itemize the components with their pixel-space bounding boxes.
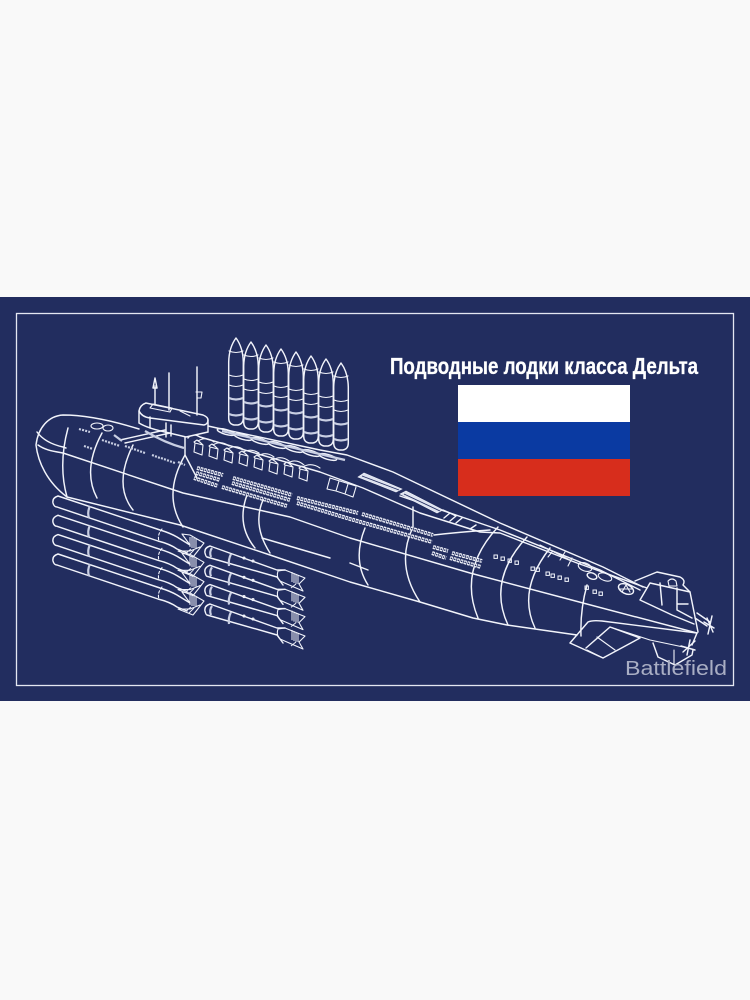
conning sail bbox=[120, 403, 208, 448]
vent rows bbox=[194, 468, 482, 567]
rear deck hatches bbox=[327, 478, 356, 497]
right torpedo stack bbox=[205, 546, 305, 649]
upper casing and deck lines bbox=[208, 426, 643, 587]
hull outline bbox=[36, 415, 577, 635]
masts bbox=[153, 367, 202, 415]
propellers bbox=[681, 613, 714, 655]
frame border bbox=[16, 314, 734, 686]
missile hatches bbox=[194, 439, 320, 481]
hull frames bbox=[63, 428, 587, 636]
ballistic missiles bbox=[229, 338, 348, 450]
waterline bbox=[38, 445, 697, 633]
portholes bbox=[494, 555, 602, 595]
stern hatches bbox=[540, 545, 635, 597]
background panel bbox=[0, 297, 750, 701]
long deck panels bbox=[358, 473, 476, 529]
upper stern fin bbox=[635, 572, 698, 632]
bow hatches and openings bbox=[79, 423, 185, 465]
deck tube covers bbox=[217, 427, 345, 462]
submarine bbox=[36, 367, 714, 665]
left torpedo stack bbox=[53, 496, 204, 615]
watermark: Battlefield bbox=[625, 658, 727, 680]
bow cap bbox=[37, 432, 66, 448]
lower stern plane bbox=[570, 621, 697, 665]
flag: Russia bbox=[458, 385, 630, 496]
